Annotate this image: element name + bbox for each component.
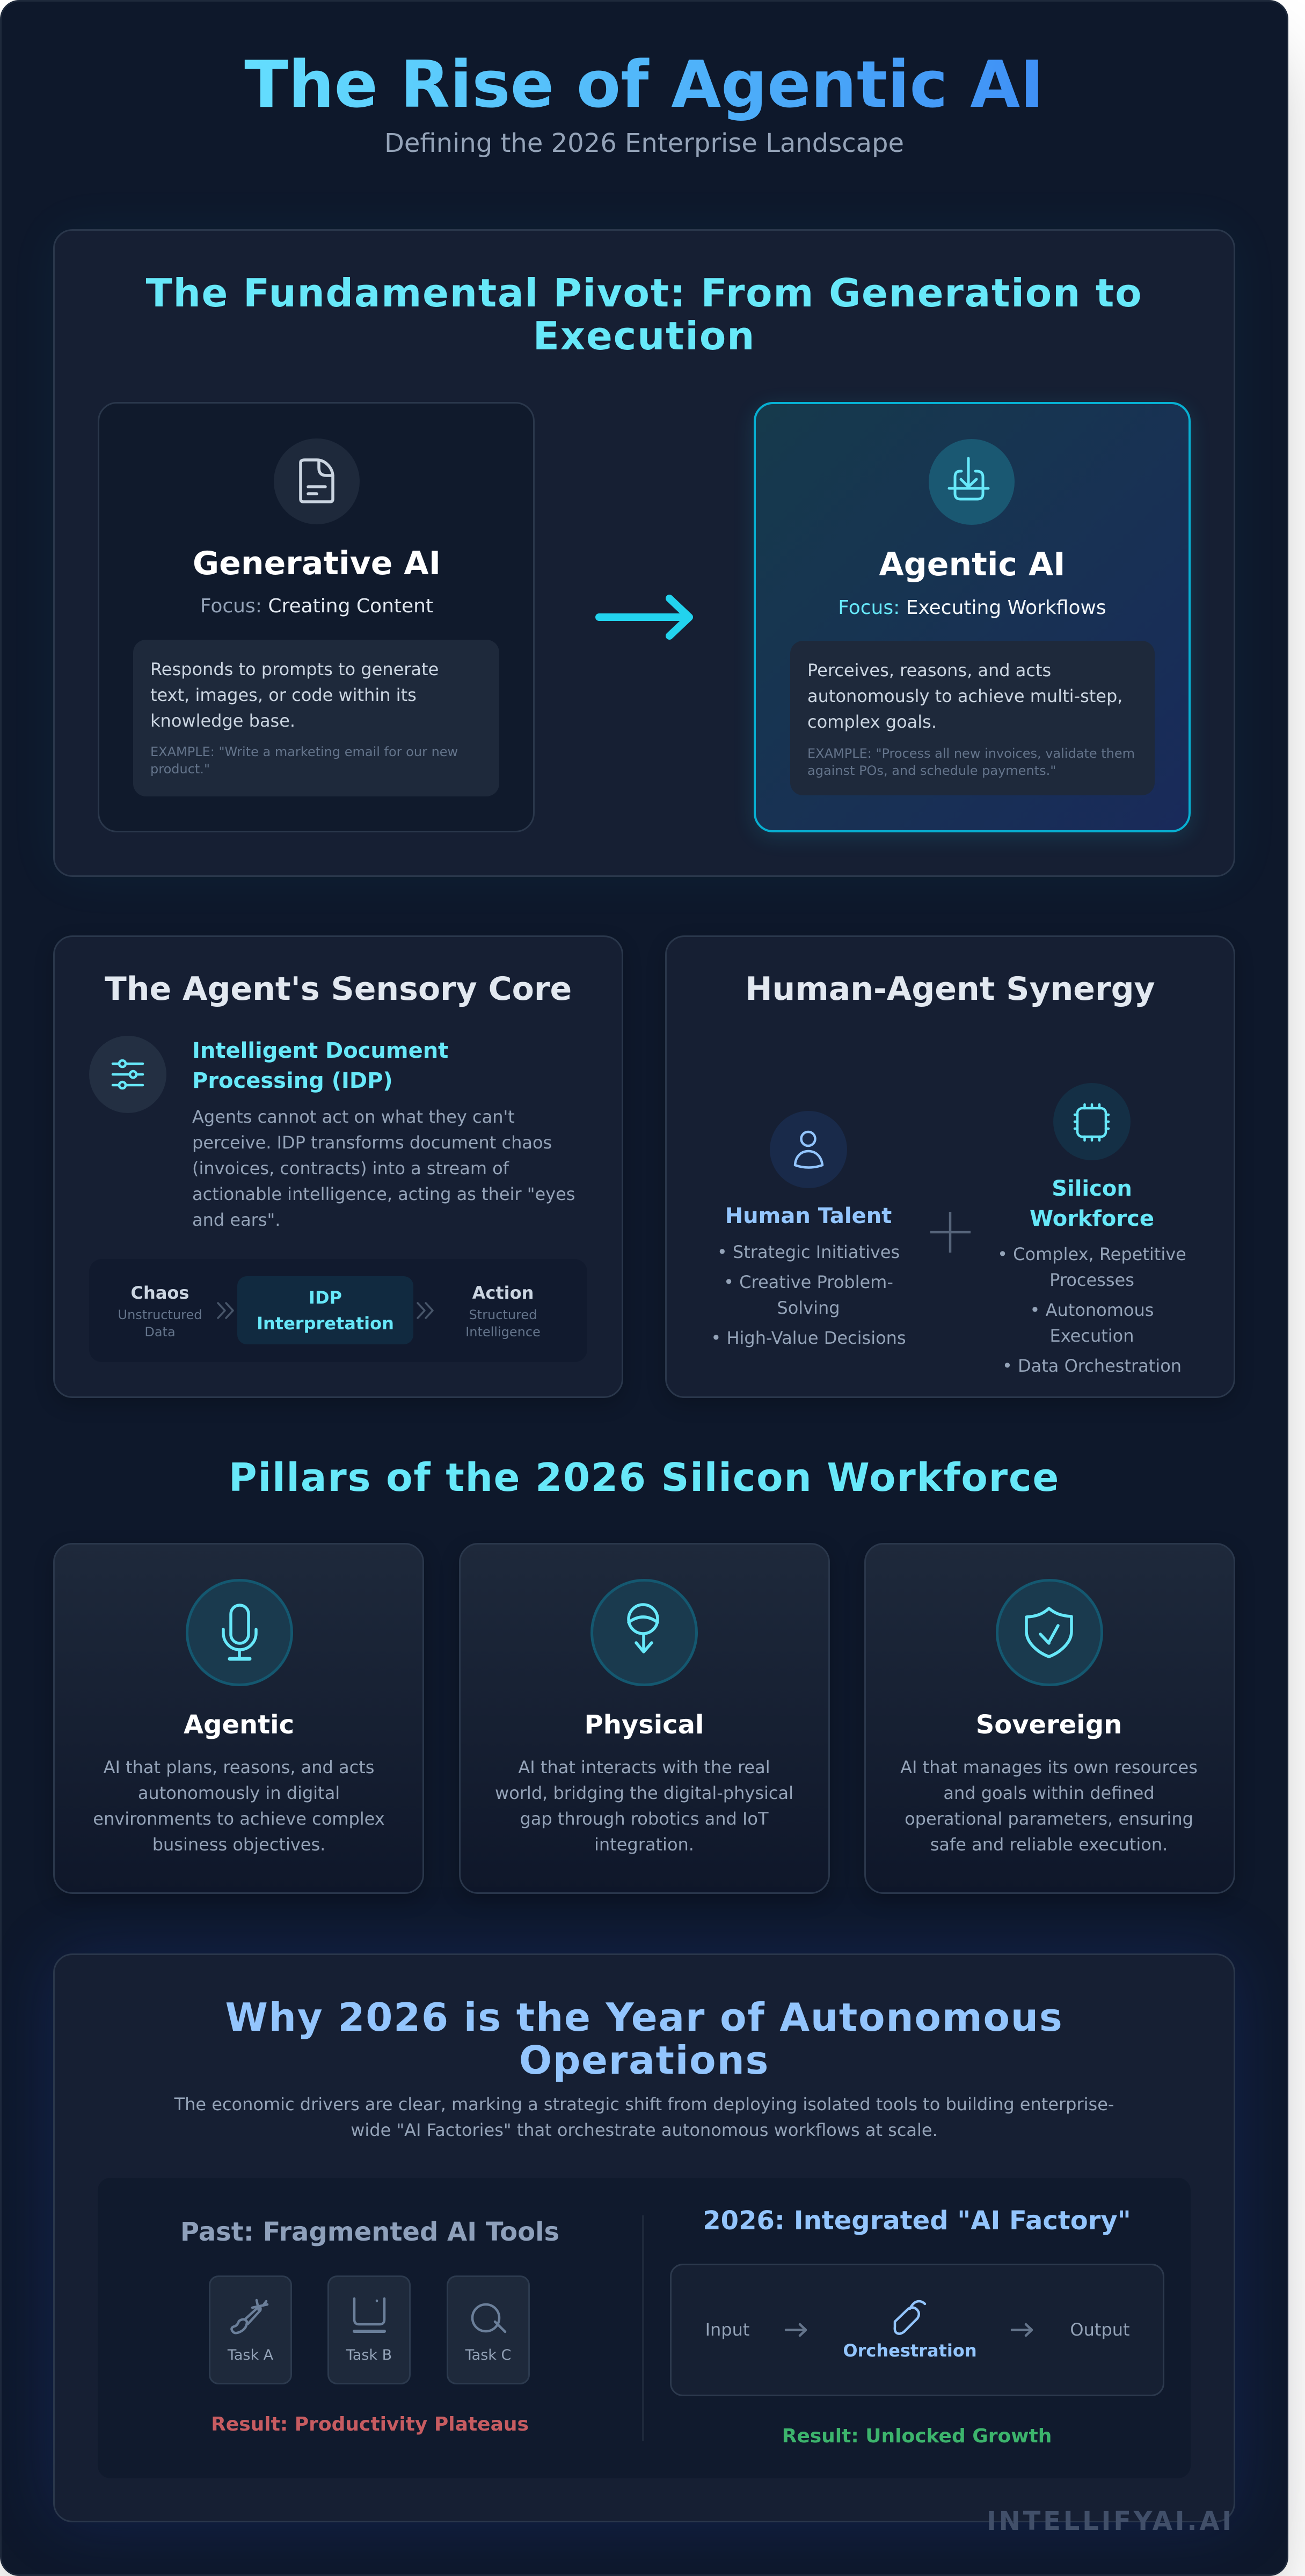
IDP description: and ears". <box>192 1210 280 1230</box>
orchestration label: Orchestration <box>843 2340 977 2361</box>
pillar description: AI that plans, reasons, and acts <box>104 1757 374 1777</box>
label: Task B <box>346 2347 392 2363</box>
heading: fundamental pivot: Execution <box>533 313 755 358</box>
pillar description: safe and reliable execution. <box>930 1834 1168 1855</box>
icon glyph: physical <box>623 1599 666 1657</box>
description box <box>133 640 499 796</box>
icon glyph: chip <box>1071 1101 1112 1144</box>
pillar title: Agentic <box>184 1710 294 1740</box>
sub-heading: IDP <box>192 1038 448 1093</box>
list: human talent: • Strategic Initiatives <box>717 1242 900 1262</box>
step caption: Data <box>144 1324 176 1340</box>
sub-heading: IDP: Intelligent Document <box>192 1038 448 1063</box>
flow diagram: chaos to action <box>89 1259 587 1362</box>
icon glyph: person <box>789 1127 828 1172</box>
list: silicon workforce: • Complex, Repetitive <box>997 1244 1186 1264</box>
example: against POs, and schedule payments." <box>807 763 1056 778</box>
step title: Chaos <box>131 1283 189 1303</box>
intro text: wide "AI Factories" that orchestrate autonomous workflows at scale. <box>351 2120 938 2140</box>
output label: Output <box>1070 2319 1130 2340</box>
heading: 2026: 2026: Integrated "AI Factory" <box>703 2206 1131 2236</box>
card title: Generative AI <box>193 545 441 582</box>
tool box: task C <box>447 2275 530 2384</box>
heading: why 2026: Operations <box>519 2038 769 2083</box>
heading: why 2026 <box>107 1996 1181 2082</box>
heading: sensory core: The Agent's Sensory Core <box>105 970 572 1008</box>
example: product." <box>150 762 210 777</box>
card: agentic AI <box>754 402 1191 832</box>
icon: document <box>274 438 360 524</box>
arrow: generation to execution <box>595 595 693 640</box>
IDP description: perceive. IDP transforms document chaos <box>192 1132 552 1153</box>
subtitle: Defining the 2026 Enterprise Landscape <box>384 128 904 158</box>
chevrons <box>217 1302 234 1319</box>
description: Responds to prompts to generate <box>150 659 439 679</box>
panel: pillar agentic <box>53 1543 424 1894</box>
label: Task A <box>228 2347 273 2363</box>
icon: pillar circle <box>590 1579 698 1686</box>
comparison box <box>98 2178 1191 2478</box>
icon: sliders circle <box>89 1036 166 1113</box>
panel: pillar physical <box>458 1543 830 1894</box>
pillar description <box>483 1754 805 1857</box>
description <box>807 660 1122 732</box>
example: EXAMPLE: "Write a marketing email for our new <box>150 744 458 759</box>
heading: silicon workforce <box>985 1173 1199 1233</box>
heading: human talent: Human Talent <box>725 1204 892 1228</box>
list: silicon workforce: • Data Orchestration <box>1002 1356 1182 1376</box>
IDP description <box>192 1107 575 1230</box>
example: EXAMPLE: "Process all new invoices, validate them <box>807 746 1135 761</box>
icon glyph: document <box>299 458 334 503</box>
description box <box>790 641 1155 795</box>
list: silicon workforce: Processes <box>1049 1270 1134 1290</box>
intro text: The economic drivers are clear, marking a strategic shift from deploying isolated tools to building enterprise- <box>174 2094 1114 2114</box>
step label: Interpretation <box>257 1313 394 1334</box>
pillar title: Physical <box>585 1710 704 1740</box>
focus line: Focus: Executing Workflows <box>838 597 1106 618</box>
pillar description: gap through robotics and IoT <box>520 1809 769 1829</box>
pillar description <box>888 1754 1210 1857</box>
arrow <box>782 2321 809 2339</box>
panel: the fundamental pivot <box>53 229 1235 877</box>
heading: fundamental pivot <box>146 270 1142 358</box>
pillar description: environments to achieve complex <box>93 1809 385 1829</box>
icon: magnifier <box>468 2300 509 2336</box>
description: Perceives, reasons, and acts <box>807 660 1051 680</box>
step caption <box>449 1306 557 1341</box>
icon: human circle <box>770 1111 847 1188</box>
arrow <box>1008 2321 1035 2339</box>
list: silicon workforce: Execution <box>1049 1326 1134 1346</box>
pillar title: Sovereign <box>976 1710 1122 1740</box>
list: human talent <box>701 1239 916 1355</box>
step label <box>257 1287 394 1334</box>
panel: the agent's sensory core <box>53 935 623 1398</box>
intro text <box>107 2091 1181 2143</box>
pillar description: AI that manages its own resources <box>900 1757 1198 1777</box>
heading: pillars: Pillars of the 2026 Silicon Workforce <box>229 1455 1060 1500</box>
icon: pillar circle <box>996 1579 1103 1686</box>
watermark: INTELLIFYAI.AI <box>987 2506 1234 2536</box>
example <box>150 744 458 777</box>
description: autonomously to achieve multi-step, <box>807 686 1122 706</box>
divider <box>642 2215 644 2441</box>
result: 2026: Result: Unlocked Growth <box>782 2425 1052 2447</box>
icon: silicon circle <box>1053 1083 1131 1160</box>
heading: fundamental pivot: The Fundamental Pivot: From Generation to <box>146 270 1142 316</box>
description: complex goals. <box>807 712 937 732</box>
icon glyph: sliders <box>112 1059 144 1089</box>
flow step: IDP interpretation <box>237 1276 413 1344</box>
icon: orchestration <box>891 2298 929 2337</box>
label: Task C <box>465 2347 511 2363</box>
heading: why 2026: Why 2026 is the Year of Autonomous <box>225 1995 1063 2040</box>
pillar description: business objectives. <box>152 1834 325 1855</box>
step caption: Intelligence <box>465 1324 541 1340</box>
AI factory flow box <box>670 2264 1164 2396</box>
icon glyph: inbox download <box>948 457 990 500</box>
pillar description: operational parameters, ensuring <box>905 1809 1193 1829</box>
step caption: Unstructured <box>118 1307 202 1322</box>
card: generative AI <box>98 402 535 832</box>
heading: silicon workforce: Workforce <box>1030 1206 1154 1231</box>
heading: synergy: Human-Agent Synergy <box>745 970 1155 1008</box>
flow step: chaos <box>118 1283 202 1340</box>
list: human talent: • Creative Problem- <box>724 1272 893 1292</box>
tool box: task B <box>327 2275 411 2384</box>
pillar description <box>78 1754 400 1857</box>
icon glyph: shield check <box>1023 1605 1075 1660</box>
icon: agentic circle <box>929 439 1015 525</box>
tool box: task A <box>209 2275 292 2384</box>
list: human talent: Solving <box>777 1298 840 1318</box>
IDP description: Agents cannot act on what they can't <box>192 1107 515 1127</box>
step label: IDP <box>309 1287 342 1308</box>
input label: Input <box>705 2319 749 2340</box>
focus line: Focus: Creating Content <box>200 595 433 617</box>
pillar description: integration. <box>594 1834 694 1855</box>
step caption: Structured <box>469 1307 537 1322</box>
description: knowledge base. <box>150 711 295 731</box>
IDP description: (invoices, contracts) into a stream of <box>192 1158 509 1179</box>
chevrons <box>417 1302 434 1319</box>
flow step: action <box>465 1283 541 1340</box>
result: past: Result: Productivity Plateaus <box>211 2413 529 2435</box>
pillar description: world, bridging the digital-physical <box>495 1783 793 1803</box>
pillar description: AI that interacts with the real <box>518 1757 770 1777</box>
list: silicon workforce <box>985 1241 1199 1383</box>
panel: why 2026 <box>53 1953 1235 2522</box>
panel: pillar sovereign <box>864 1543 1235 1894</box>
icon: pillar circle <box>186 1579 293 1686</box>
list: silicon workforce: • Autonomous <box>1030 1300 1154 1320</box>
panel: human-agent synergy <box>665 935 1235 1398</box>
example <box>807 746 1135 778</box>
pillar description: and goals within defined <box>943 1783 1155 1803</box>
heading: silicon workforce: Silicon <box>1052 1176 1132 1201</box>
icon: brush <box>228 2297 271 2337</box>
description: text, images, or code within its <box>150 685 417 705</box>
icon glyph: microphone <box>217 1599 263 1664</box>
icon: plus <box>929 1210 973 1254</box>
card title: Agentic AI <box>879 546 1066 583</box>
IDP description: actionable intelligence, acting as their "eyes <box>192 1184 575 1204</box>
step caption <box>118 1307 202 1340</box>
heading: past: Past: Fragmented AI Tools <box>180 2217 559 2247</box>
sub-heading: IDP: Processing (IDP) <box>192 1069 393 1093</box>
icon: cup <box>349 2296 390 2334</box>
list: human talent: • High-Value Decisions <box>711 1328 906 1348</box>
step title: Action <box>472 1283 534 1303</box>
pillar description: autonomously in digital <box>138 1783 340 1803</box>
title: The Rise of Agentic AI <box>244 48 1044 122</box>
description <box>150 659 439 731</box>
